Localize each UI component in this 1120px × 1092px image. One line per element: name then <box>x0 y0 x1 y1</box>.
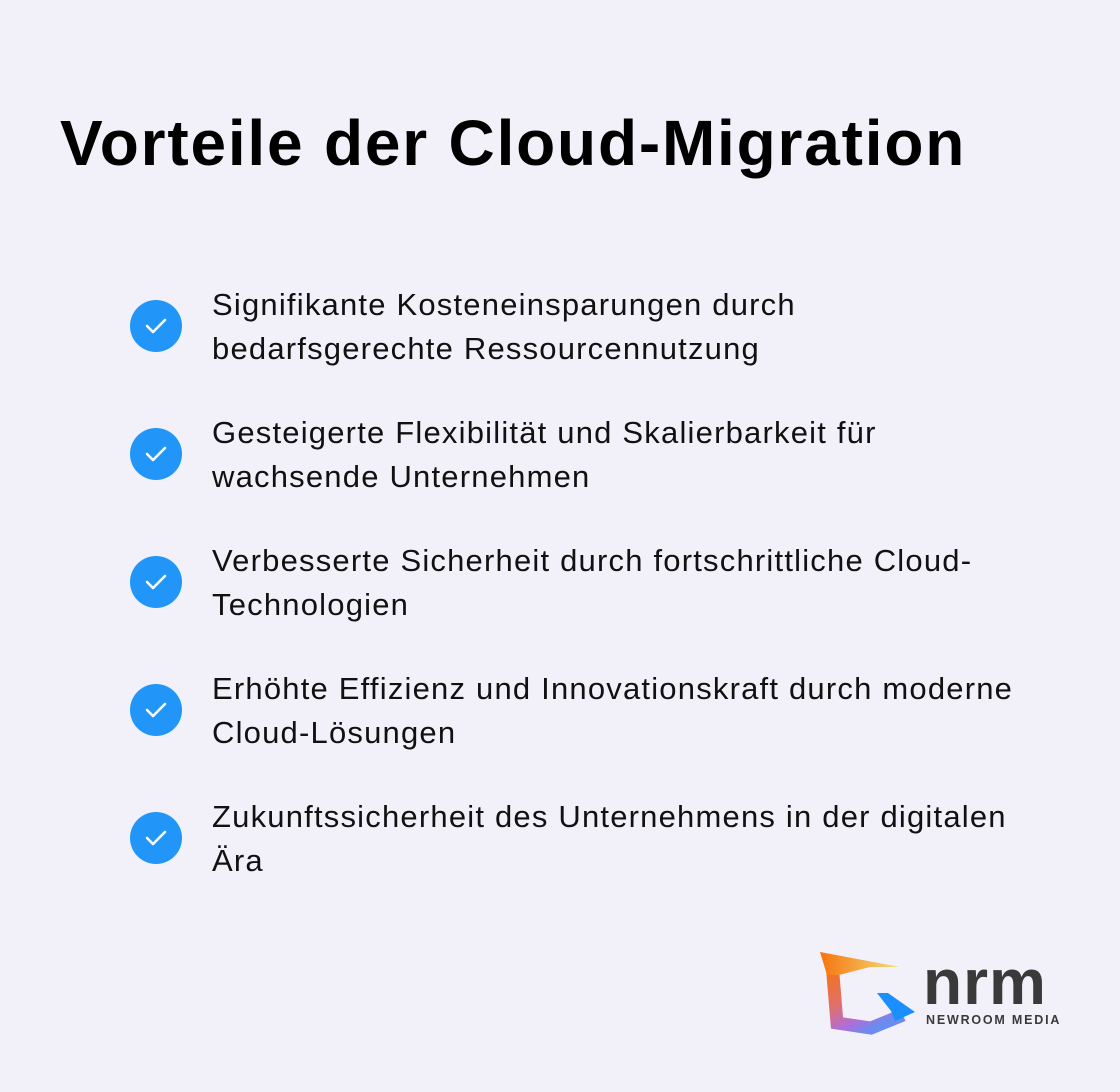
text: Verbesserte Sicherheit durch fortschrittliche Cloud- <box>212 543 972 578</box>
item 3 <box>130 543 972 622</box>
logo <box>820 946 1061 1035</box>
item 5 <box>130 799 1007 878</box>
icon: check <box>130 428 182 480</box>
logo text: nrm <box>923 946 1047 1018</box>
text: Gesteigerte Flexibilität und Skalierbarkeit für <box>212 415 877 450</box>
text <box>212 287 796 366</box>
text <box>212 415 877 494</box>
title: Vorteile der Cloud-Migration <box>60 107 966 179</box>
logo mark <box>820 952 915 1035</box>
text: Technologien <box>212 587 409 622</box>
text: Ära <box>212 843 264 878</box>
logo: NEWROOM MEDIA <box>926 1013 1061 1027</box>
icon: check <box>130 812 182 864</box>
text <box>212 671 1013 750</box>
icon: check <box>130 300 182 352</box>
item 4 <box>130 671 1013 750</box>
text: wachsende Unternehmen <box>212 459 590 494</box>
text: Zukunftssicherheit des Unternehmens in der digitalen <box>212 799 1007 834</box>
item 2 <box>130 415 877 494</box>
icon: check <box>130 684 182 736</box>
text <box>212 543 972 622</box>
icon: check <box>130 556 182 608</box>
text: bedarfsgerechte Ressourcennutzung <box>212 331 760 366</box>
text: Cloud-Lösungen <box>212 715 456 750</box>
text: Erhöhte Effizienz und Innovationskraft durch moderne <box>212 671 1013 706</box>
text: Signifikante Kosteneinsparungen durch <box>212 287 796 322</box>
text <box>212 799 1007 878</box>
item 1 <box>130 287 796 366</box>
